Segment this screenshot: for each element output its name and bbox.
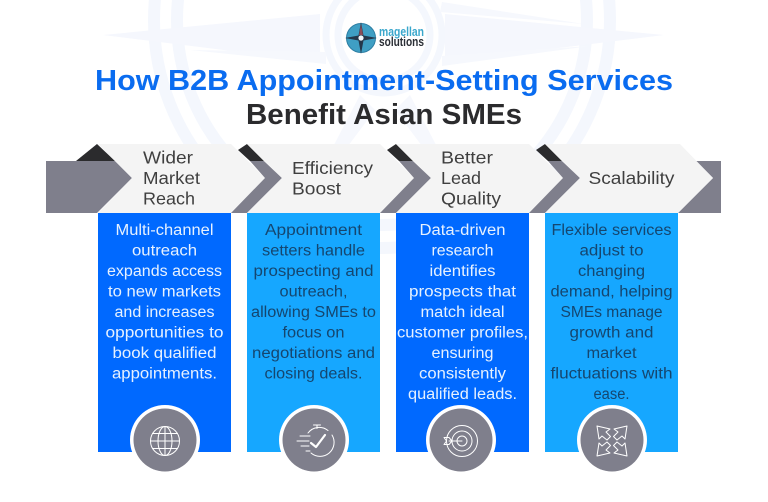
body text: SMEs manage xyxy=(560,304,662,321)
chevron process row xyxy=(46,144,721,213)
connector 3 xyxy=(529,144,580,213)
body text: fluctuations with xyxy=(550,366,672,382)
title xyxy=(95,65,673,131)
body text: and increases xyxy=(114,304,215,321)
body text: prospecting and xyxy=(254,263,374,280)
logo wordmark: magellan xyxy=(379,25,424,39)
heading: Efficiency Boost: Efficiency xyxy=(292,158,373,178)
body text xyxy=(251,222,376,382)
body text: allowing SMEs to xyxy=(251,304,376,321)
heading: Better Lead Quality: Lead xyxy=(441,168,481,188)
icon: stopwatch with check xyxy=(279,405,349,475)
body text xyxy=(397,222,528,403)
body text: changing xyxy=(578,263,645,280)
body text: customer profiles, xyxy=(397,324,528,342)
body text: ease. xyxy=(594,386,630,403)
panel: Scalability xyxy=(545,213,678,452)
body text: Data-driven xyxy=(420,222,506,239)
heading: Better Lead Quality: Better xyxy=(441,148,493,168)
body text: expands access xyxy=(107,263,222,280)
body text: setters handle xyxy=(262,242,365,260)
connector 1 xyxy=(231,144,282,213)
step 3 band xyxy=(396,144,563,213)
logo wordmark xyxy=(379,25,424,49)
body text: prospects that xyxy=(409,284,517,300)
body text: outreach, xyxy=(280,284,348,300)
step 4 band xyxy=(545,144,713,213)
step 1 band xyxy=(98,144,265,213)
body text: market xyxy=(586,345,637,362)
heading: Wider Market Reach: Market xyxy=(143,168,200,188)
body text: outreach xyxy=(132,242,197,260)
icon: four arrows scaling xyxy=(577,405,647,475)
body text: Appointment xyxy=(265,222,363,239)
body text: book qualified xyxy=(112,345,216,362)
body text: match ideal xyxy=(420,304,504,321)
body text: ensuring xyxy=(432,345,494,362)
connector 2 xyxy=(380,144,431,213)
body text: adjust to xyxy=(580,242,644,260)
panel: Better Lead Quality xyxy=(396,213,529,452)
panel: Wider Market Reach xyxy=(98,213,231,452)
body text: qualified leads. xyxy=(408,386,517,403)
body text: closing deals. xyxy=(264,366,362,382)
heading: Better Lead Quality: Quality xyxy=(441,188,501,208)
heading: Wider Market Reach: Reach xyxy=(143,188,195,208)
body text: Multi-channel xyxy=(116,222,214,239)
icon: target with arrow xyxy=(426,405,496,475)
body text: Flexible services xyxy=(552,222,672,239)
logo: magellan solutions xyxy=(345,22,424,54)
body text: negotiations and xyxy=(252,345,375,362)
background compass watermark xyxy=(103,0,664,248)
body text xyxy=(106,222,224,382)
logo wordmark: solutions xyxy=(379,35,424,49)
heading: Efficiency Boost xyxy=(292,158,373,198)
end arrow xyxy=(678,161,721,213)
body text: opportunities to xyxy=(106,324,224,342)
heading: Wider Market Reach: Wider xyxy=(143,148,193,168)
step 2 band xyxy=(247,144,414,213)
body text: focus on xyxy=(282,324,344,342)
start arrow xyxy=(46,144,132,213)
body text: growth and xyxy=(570,324,654,342)
body text: research xyxy=(432,242,494,260)
title: Benefit Asian SMEs xyxy=(246,99,522,131)
icon: globe xyxy=(130,405,200,475)
heading: Wider Market Reach xyxy=(143,148,200,208)
heading: Efficiency Boost: Boost xyxy=(292,178,341,198)
body text: to new markets xyxy=(108,284,221,300)
title: How B2B Appointment-Setting Services xyxy=(95,65,673,97)
body text: consistently xyxy=(419,366,506,382)
icon: compass xyxy=(345,22,377,54)
body text: demand, helping xyxy=(550,284,672,300)
heading: Better Lead Quality xyxy=(441,148,501,208)
panel: Efficiency Boost xyxy=(247,213,380,452)
body text xyxy=(550,222,672,403)
body text: appointments. xyxy=(112,366,217,382)
body text: identifies xyxy=(430,263,496,280)
heading: Scalability: Scalability xyxy=(588,168,675,188)
